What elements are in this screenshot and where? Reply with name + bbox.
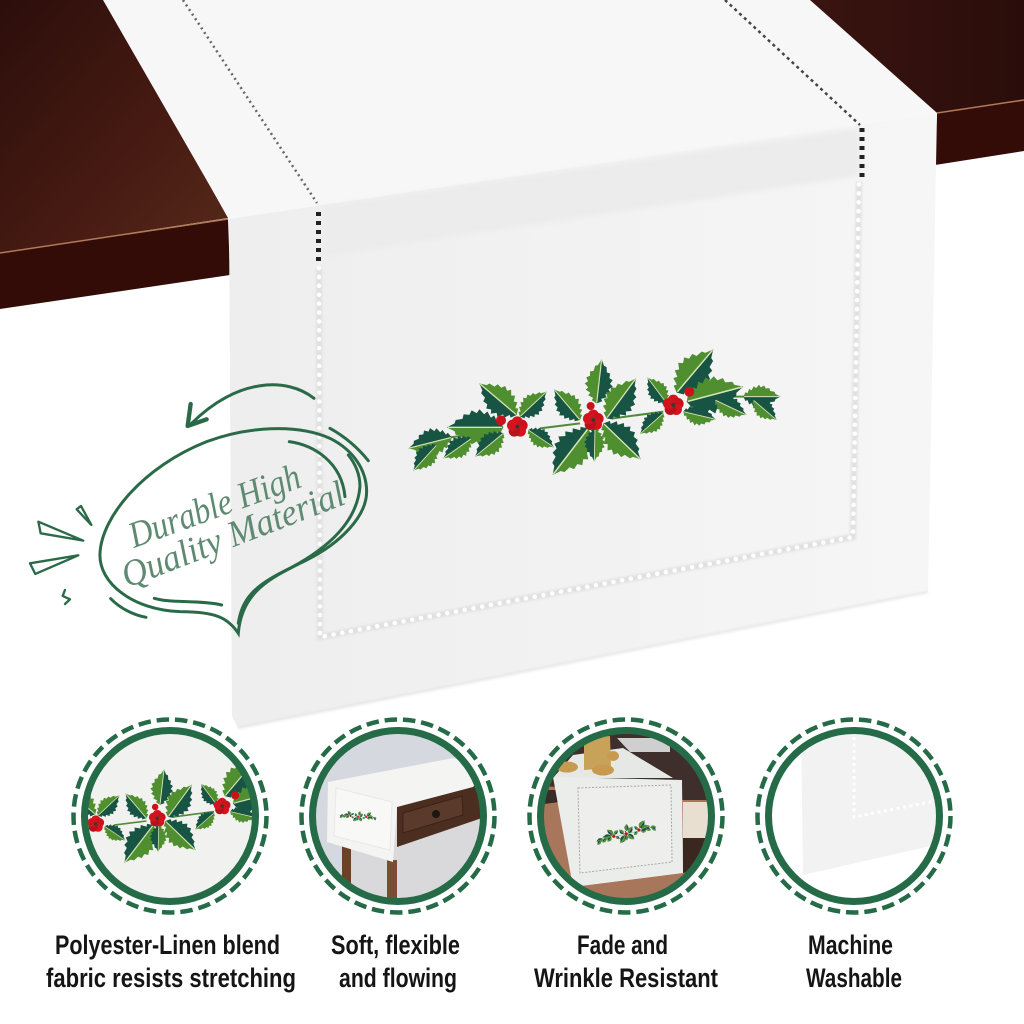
callout text: Durable High [122, 456, 306, 557]
hemstitch on top, right [725, 0, 860, 125]
feature 1: embroidery close-up [71, 717, 269, 915]
runner top surface [103, 0, 937, 219]
label: machine washable: Machine [808, 930, 893, 960]
white hemstitch dots on drop [319, 182, 859, 637]
dark square stitches, right [860, 128, 864, 178]
label: fade and wrinkle resistant: Fade and [577, 930, 668, 960]
speech bubble [100, 428, 368, 633]
hemstitch on top, left [183, 0, 317, 203]
inset image [802, 734, 936, 875]
embroidered holly sprig [405, 338, 783, 486]
rings [758, 720, 950, 912]
feature 2: runner on console table [302, 720, 494, 912]
inset image [544, 734, 708, 898]
feature 3: runner on dining table [530, 720, 722, 912]
callout: durable high quality material [30, 385, 368, 633]
label: polyester-linen blend: Polyester-Linen blend [55, 930, 280, 960]
bottom edge shadow [238, 592, 928, 728]
label: fade and wrinkle resistant [534, 930, 718, 993]
label: soft, flexible: Soft, flexible [331, 930, 460, 960]
hem shadow line [319, 182, 859, 637]
inset image [316, 734, 480, 898]
label: polyester-linen blend: fabric resists stretching [46, 963, 296, 993]
label: machine washable [806, 930, 902, 993]
feature 4: hem corner close-up [758, 720, 950, 912]
spark marks [30, 506, 91, 604]
rings [74, 720, 266, 912]
rings [530, 720, 722, 912]
label: machine washable: Washable [806, 963, 902, 993]
label: polyester-linen blend [46, 930, 296, 993]
dark wood table, left side [0, 0, 230, 309]
dark wood table, right side [808, 0, 1024, 165]
label: fade and wrinkle resistant: Wrinkle Resistant [534, 963, 718, 993]
runner hanging drop [229, 113, 937, 728]
dark square stitches, left [316, 212, 321, 263]
callout text: Quality Material [116, 474, 351, 596]
rings [302, 720, 494, 912]
sheer hem band at table edge [322, 128, 860, 256]
inset image [88, 734, 252, 898]
label: soft, flexible [331, 930, 460, 993]
label: soft, flexible: and flowing [339, 963, 457, 993]
arrow [188, 385, 314, 426]
white table runner with hemstitching [103, 0, 937, 728]
